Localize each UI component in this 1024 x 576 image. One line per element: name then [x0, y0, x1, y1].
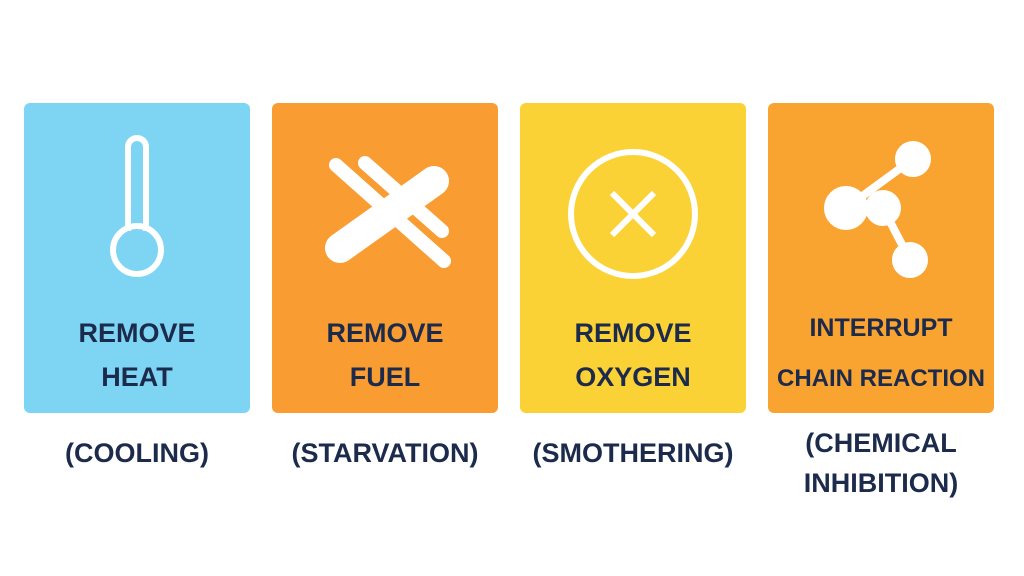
heading: interrupt chain reaction: INTERRUPT	[809, 314, 953, 342]
heading: interrupt chain reaction: CHAIN REACTION	[777, 365, 985, 392]
heading: remove fuel: FUEL	[350, 362, 420, 392]
caption: cooling: (COOLING)	[65, 438, 209, 468]
caption: chemical inhibition: INHIBITION)	[804, 468, 958, 498]
heading: remove oxygen: OXYGEN	[575, 362, 691, 392]
heading: interrupt chain reaction	[777, 314, 985, 392]
heading: remove heat: REMOVE	[78, 318, 196, 348]
caption: smothering: (SMOTHERING)	[532, 438, 733, 468]
icon: molecule	[824, 141, 931, 278]
heading: remove oxygen	[574, 318, 692, 392]
icon: circle x	[568, 149, 698, 279]
heading: remove oxygen: REMOVE	[574, 318, 692, 348]
caption: starvation: (STARVATION)	[292, 438, 478, 468]
icon: thermometer	[110, 135, 164, 277]
panel: remove oxygen	[520, 103, 746, 413]
heading: remove heat: HEAT	[101, 362, 173, 392]
caption: chemical inhibition: (CHEMICAL	[805, 428, 957, 458]
panel: remove fuel	[272, 103, 498, 413]
caption: chemical inhibition	[804, 428, 958, 498]
heading: remove fuel: REMOVE	[326, 318, 444, 348]
heading: remove heat	[78, 318, 196, 392]
panel: remove heat	[24, 103, 250, 413]
panel: interrupt chain reaction	[768, 103, 994, 413]
heading: remove fuel	[326, 318, 444, 392]
icon: logs crossed	[325, 156, 451, 268]
